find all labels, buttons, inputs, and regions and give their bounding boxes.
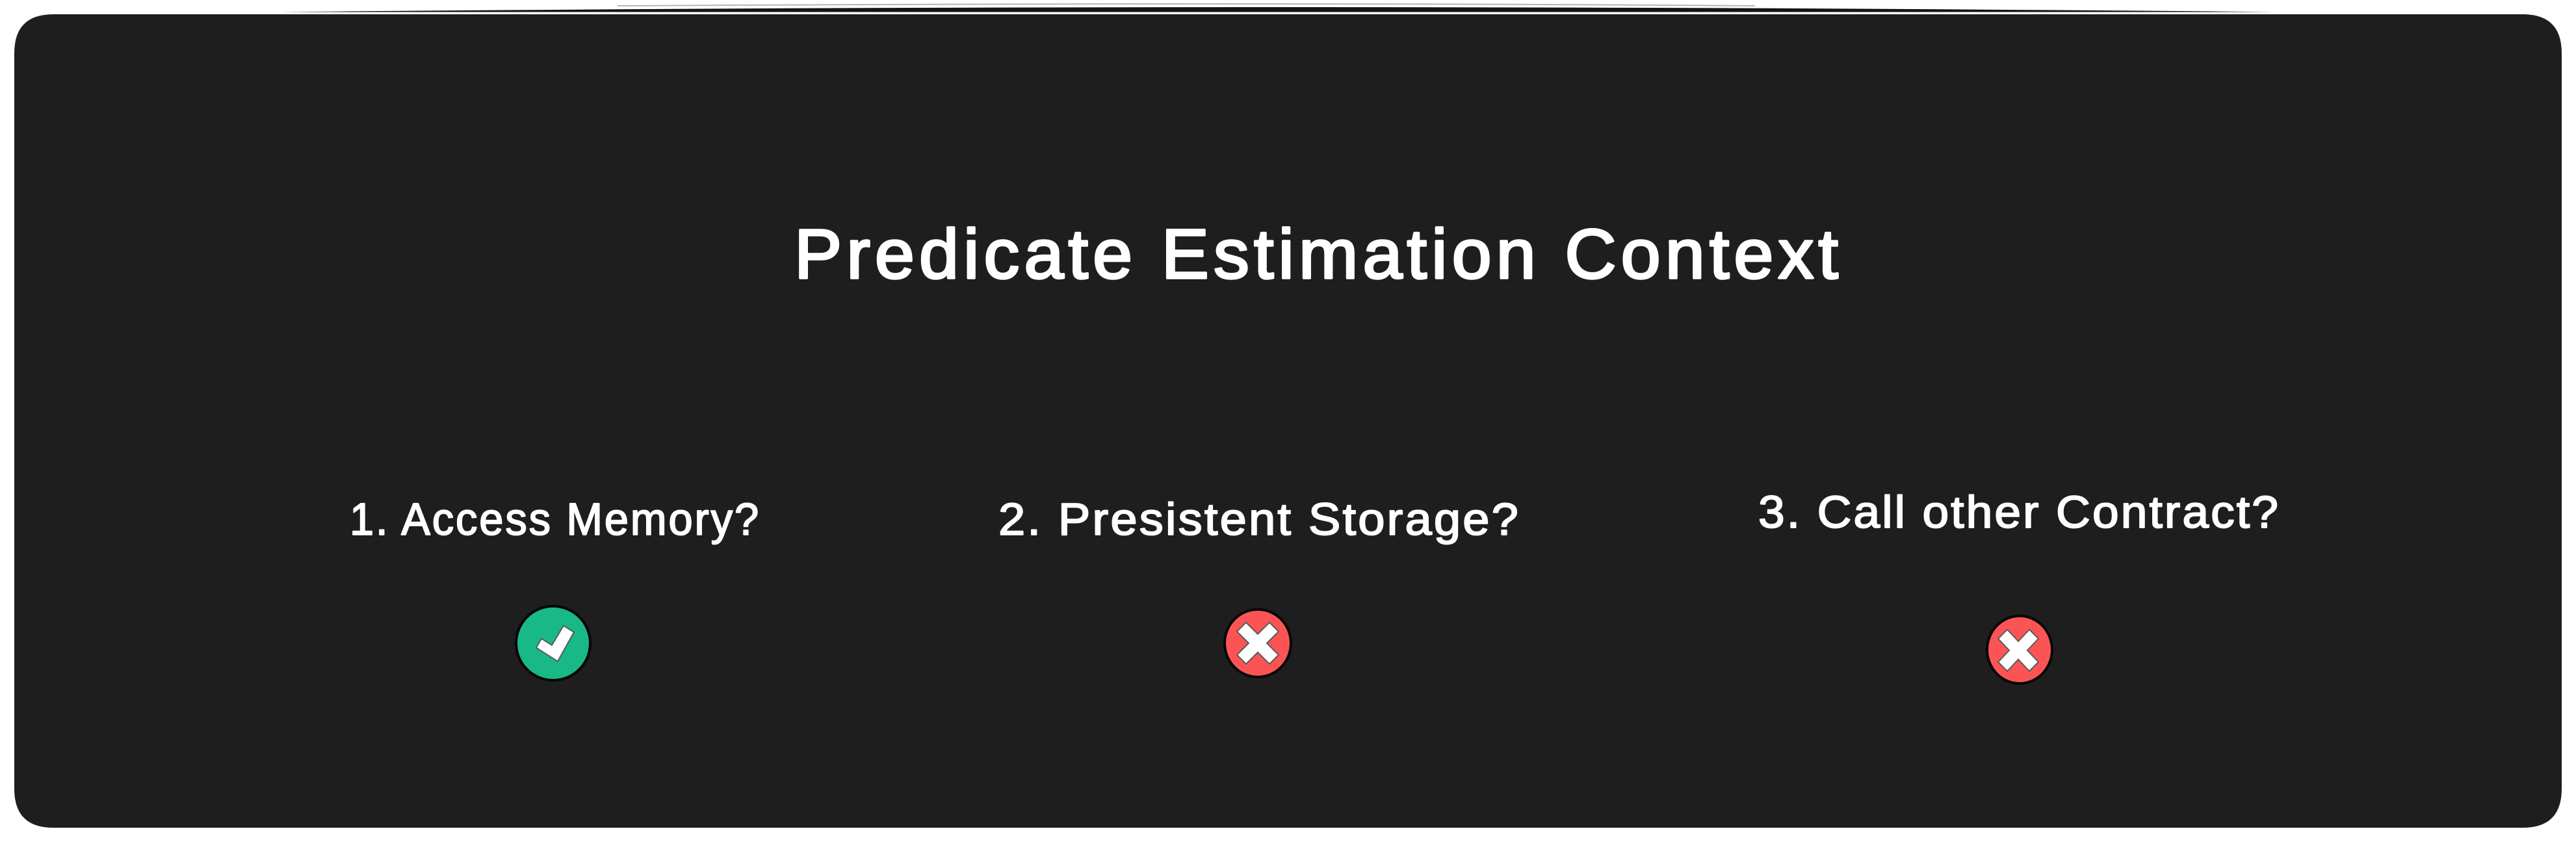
column 1: access memory: [350, 494, 761, 680]
heading: call other contract: 3. Call other Contract?: [1758, 487, 2280, 537]
icon: green check: [516, 606, 590, 680]
column 2: persistent storage: [998, 494, 1520, 677]
heading: persistent storage: 2. Presistent Storage?: [998, 494, 1520, 544]
title: Predicate Estimation Context: [794, 214, 1843, 293]
icon: red cross: [1987, 616, 2052, 683]
icon: red cross: [1225, 609, 1291, 677]
column 3: call other contract: [1758, 487, 2280, 683]
heading: access memory: 1. Access Memory?: [350, 494, 761, 544]
